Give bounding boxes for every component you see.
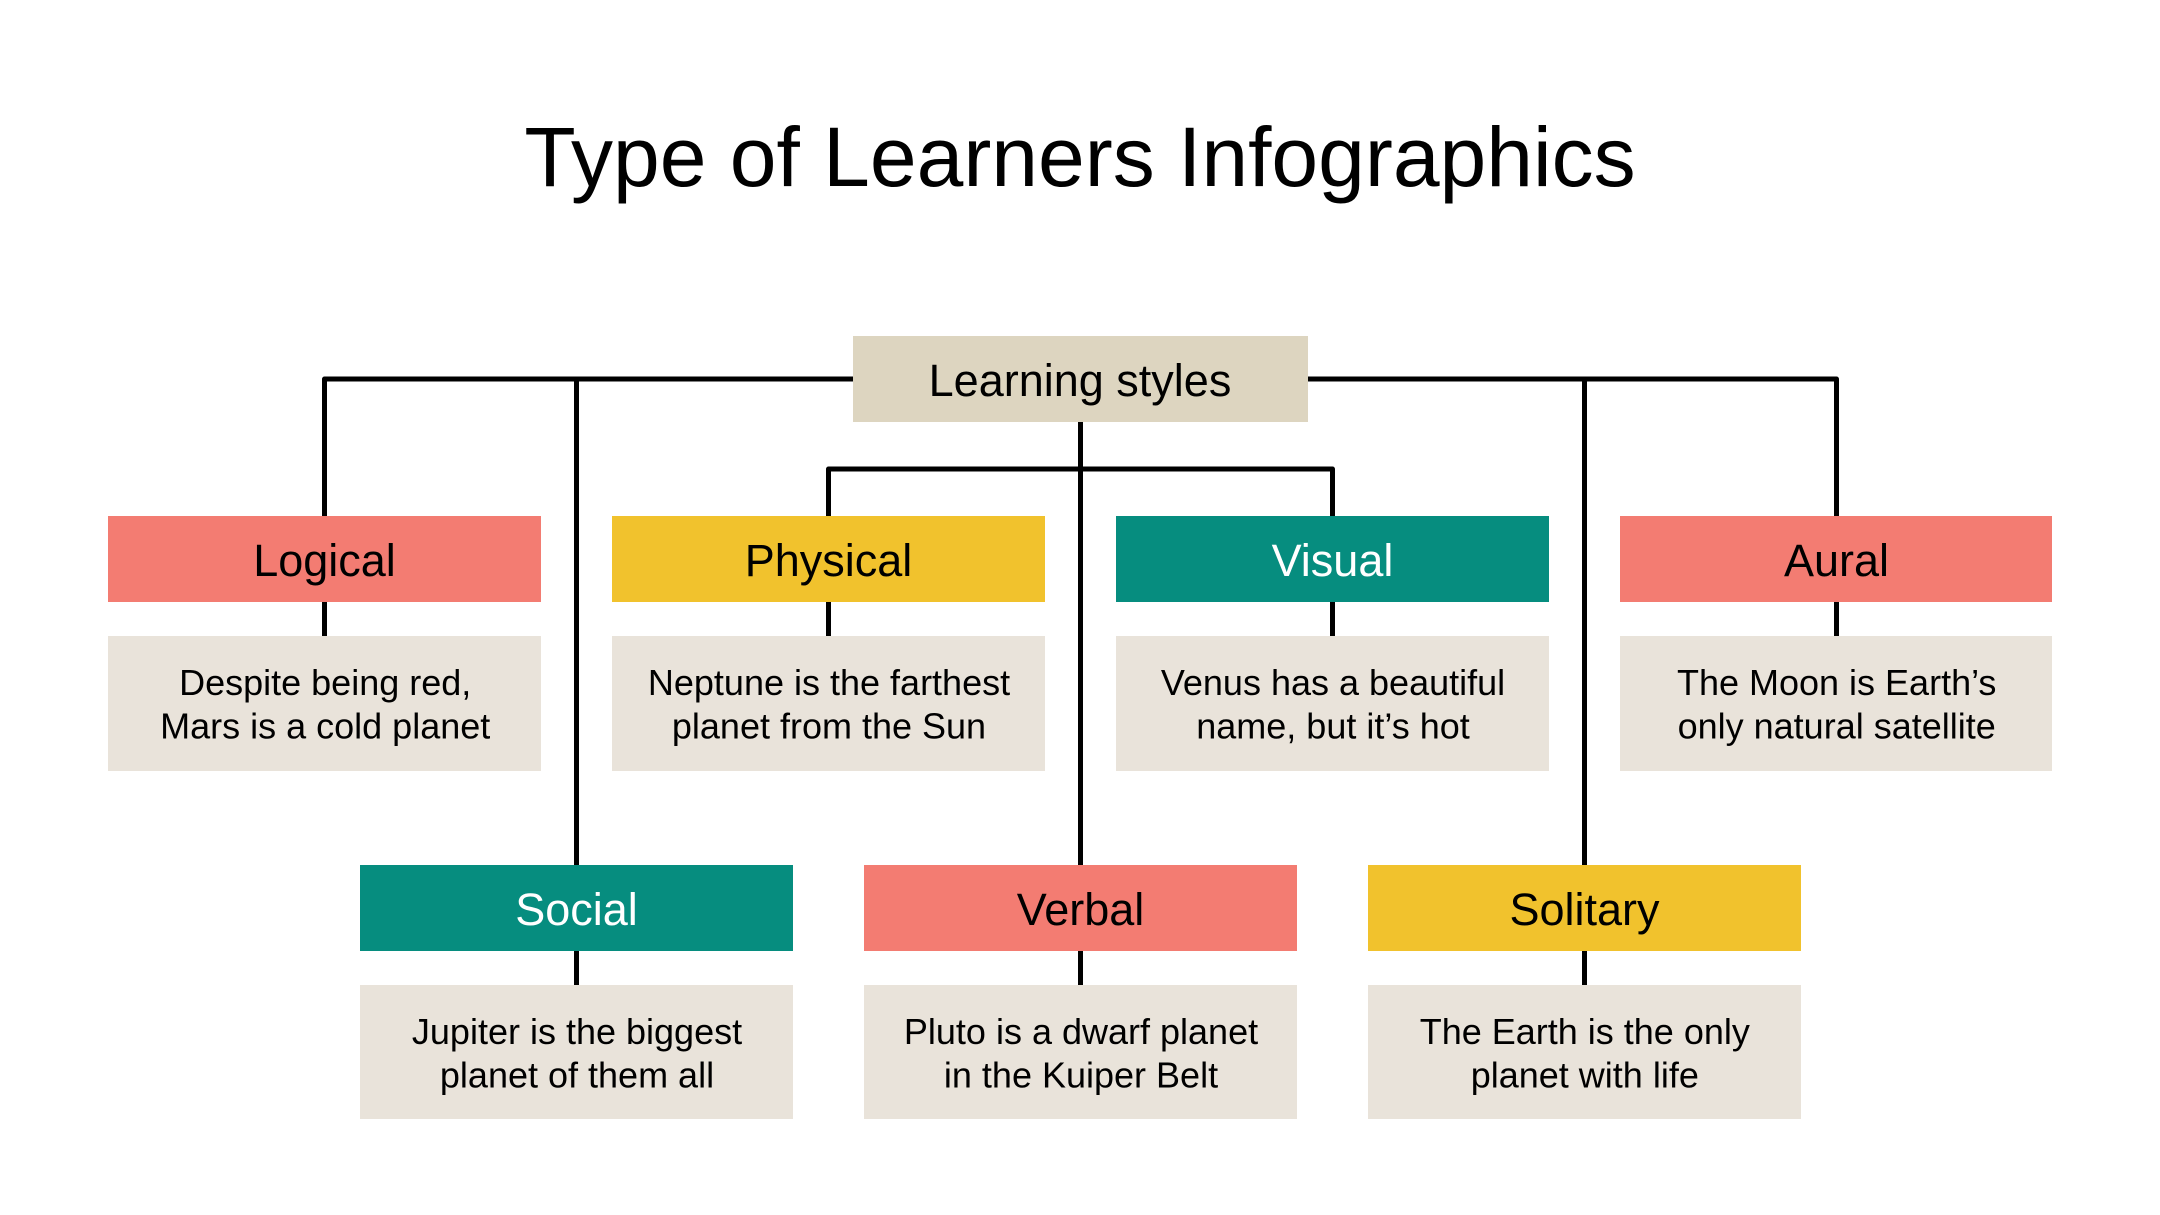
panel: Social: Social (515, 884, 638, 935)
panel: Logical: Despite being red, (179, 662, 471, 703)
panel: Physical: Neptune is the farthest (648, 662, 1010, 703)
panel: Solitary: planet with life (1471, 1054, 1699, 1096)
root node: Learning styles (853, 336, 1308, 422)
panel: Solitary: Solitary (1509, 884, 1660, 935)
panel: Logical: Logical (253, 535, 396, 586)
panel: Verbal (864, 865, 1297, 1119)
panel: Visual: name, but it’s hot (1196, 706, 1470, 746)
connector lines (324, 379, 1836, 985)
panel: Social (360, 865, 793, 1119)
panel: Verbal: Pluto is a dwarf planet (904, 1011, 1258, 1052)
panel: Visual: Venus has a beautiful (1161, 662, 1505, 703)
panel: Verbal: Verbal (1017, 884, 1144, 935)
panel: Logical (108, 516, 541, 771)
panel: Social: Jupiter is the biggest (412, 1011, 742, 1052)
root node: Learning styles: Learning styles (929, 355, 1231, 406)
panel: Physical (612, 516, 1045, 771)
panel: Aural: only natural satellite (1678, 706, 1996, 746)
panel: Aural: Aural (1784, 535, 1889, 586)
title: Type of Learners Infographics (524, 110, 1636, 204)
panel: Solitary: The Earth is the only (1420, 1011, 1750, 1052)
panel: Logical: Mars is a cold planet (160, 706, 490, 746)
panel: Verbal: in the Kuiper Belt (944, 1054, 1218, 1096)
panel: Aural: The Moon is Earth’s (1677, 662, 1996, 703)
panel: Solitary (1368, 865, 1801, 1119)
panel: Visual (1116, 516, 1549, 771)
panel: Visual: Visual (1272, 535, 1393, 586)
panel: Physical: planet from the Sun (672, 706, 986, 746)
panel: Social: planet of them all (440, 1054, 714, 1096)
panel: Physical: Physical (745, 535, 912, 586)
panel: Aural (1620, 516, 2052, 771)
